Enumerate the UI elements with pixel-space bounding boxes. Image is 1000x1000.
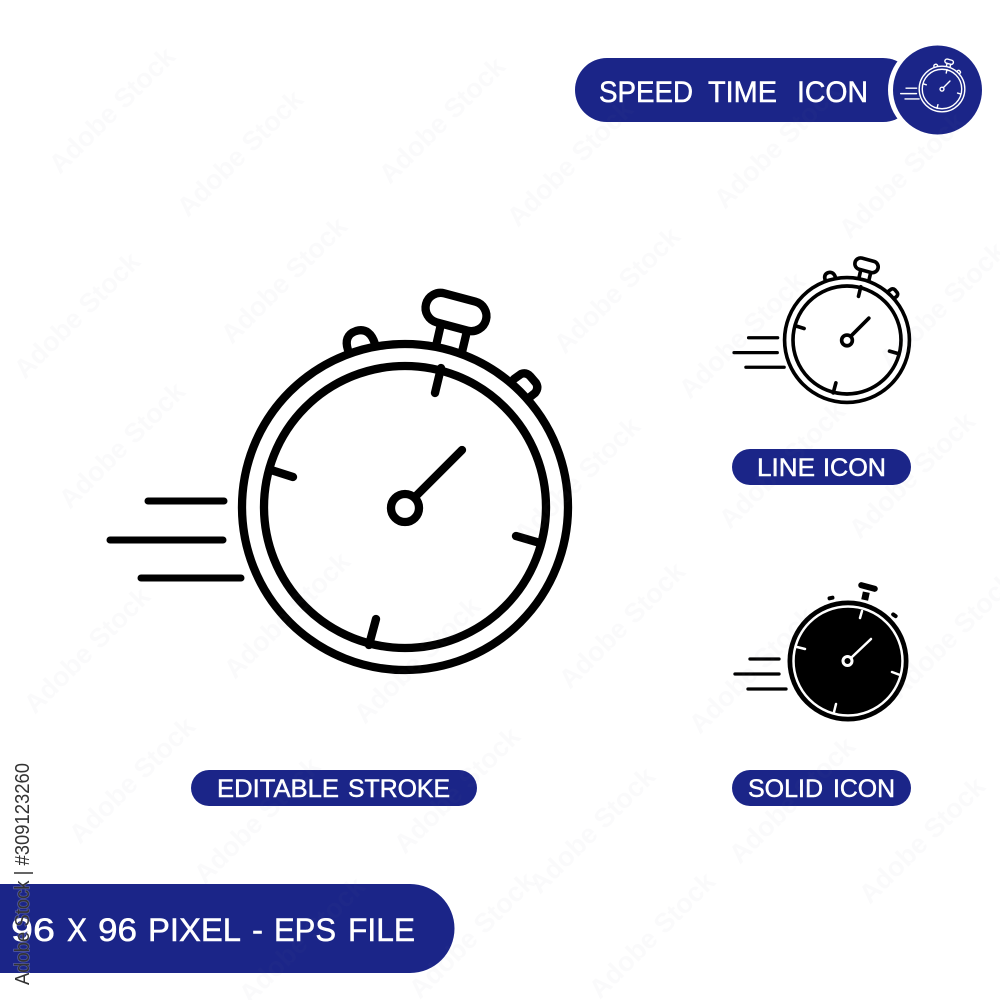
faint watermark pattern: Adobe Stock xyxy=(215,211,354,349)
faint watermark pattern: Adobe Stock xyxy=(8,246,147,384)
faint watermark pattern: Adobe Stock xyxy=(683,601,822,739)
banner: pixel size and file type: - xyxy=(252,912,263,948)
faint watermark pattern: Adobe Stock xyxy=(18,581,157,719)
crown and side buttons xyxy=(827,582,898,619)
faint watermark pattern: Adobe Stock xyxy=(348,591,487,729)
banner: pixel size and file type xyxy=(0,884,454,973)
label: editable stroke: STROKE xyxy=(348,775,450,803)
faint watermark pattern: Adobe Stock xyxy=(43,41,182,179)
label: line icon: ICON xyxy=(823,454,886,482)
banner: pixel size and file type: EPS xyxy=(274,912,336,948)
banner: pixel size and file type: 96 xyxy=(98,912,137,948)
faint watermark pattern: Adobe Stock xyxy=(53,376,192,514)
faint watermark pattern: Adobe Stock xyxy=(373,51,512,189)
faint watermark pattern: Adobe Stock xyxy=(843,406,982,544)
header banner: speed time icon xyxy=(575,42,984,138)
faint watermark pattern: Adobe Stock xyxy=(188,751,327,889)
main stopwatch line icon xyxy=(110,289,568,670)
faint watermark pattern: Adobe Stock xyxy=(548,221,687,359)
header pill xyxy=(575,58,915,122)
faint watermark pattern: Adobe Stock xyxy=(853,771,992,909)
faint watermark pattern: Adobe Stock xyxy=(673,266,812,404)
banner: pixel size and file type: X xyxy=(67,912,87,948)
label: editable stroke: EDITABLE xyxy=(217,775,339,803)
faint watermark pattern: Adobe Stock xyxy=(501,94,640,232)
faint watermark pattern: Adobe Stock xyxy=(508,411,647,549)
banner: pixel size and file type: PIXEL xyxy=(148,912,241,948)
faint watermark pattern: Adobe Stock xyxy=(523,761,662,899)
banner: pixel size and file type: 96 xyxy=(11,912,55,948)
faint watermark pattern: Adobe Stock xyxy=(833,106,972,244)
label: solid icon xyxy=(732,770,911,806)
faint watermark pattern: Adobe Stock xyxy=(63,711,202,849)
faint watermark pattern: Adobe Stock xyxy=(171,84,310,222)
label: solid icon: SOLID xyxy=(748,775,823,803)
label: line icon xyxy=(732,449,911,485)
header title: ICON xyxy=(797,76,868,109)
dial ring and marks xyxy=(794,606,902,716)
header icon badge xyxy=(888,42,984,138)
small line icon xyxy=(734,257,909,402)
faint watermark pattern: Adobe Stock xyxy=(713,396,852,534)
label: line icon: LINE xyxy=(757,454,815,482)
solid dial xyxy=(788,600,908,722)
faint watermark pattern: Adobe Stock xyxy=(708,76,847,214)
faint watermark pattern: Adobe Stock xyxy=(388,721,527,859)
faint watermark pattern: Adobe Stock xyxy=(723,731,862,869)
vertical stock id text: Adobe Stock | #309123260 xyxy=(12,763,34,985)
faint watermark pattern: Adobe Stock xyxy=(553,556,692,694)
small solid icon xyxy=(735,582,908,722)
header title: SPEED xyxy=(599,76,693,109)
banner: pixel size and file type: FILE xyxy=(348,912,415,948)
header title: TIME xyxy=(708,76,777,109)
label: solid icon: ICON xyxy=(833,775,895,803)
label: editable stroke xyxy=(191,770,477,806)
faint watermark pattern: Adobe Stock xyxy=(218,546,357,684)
solid speed lines xyxy=(735,659,786,689)
header title xyxy=(599,76,868,109)
